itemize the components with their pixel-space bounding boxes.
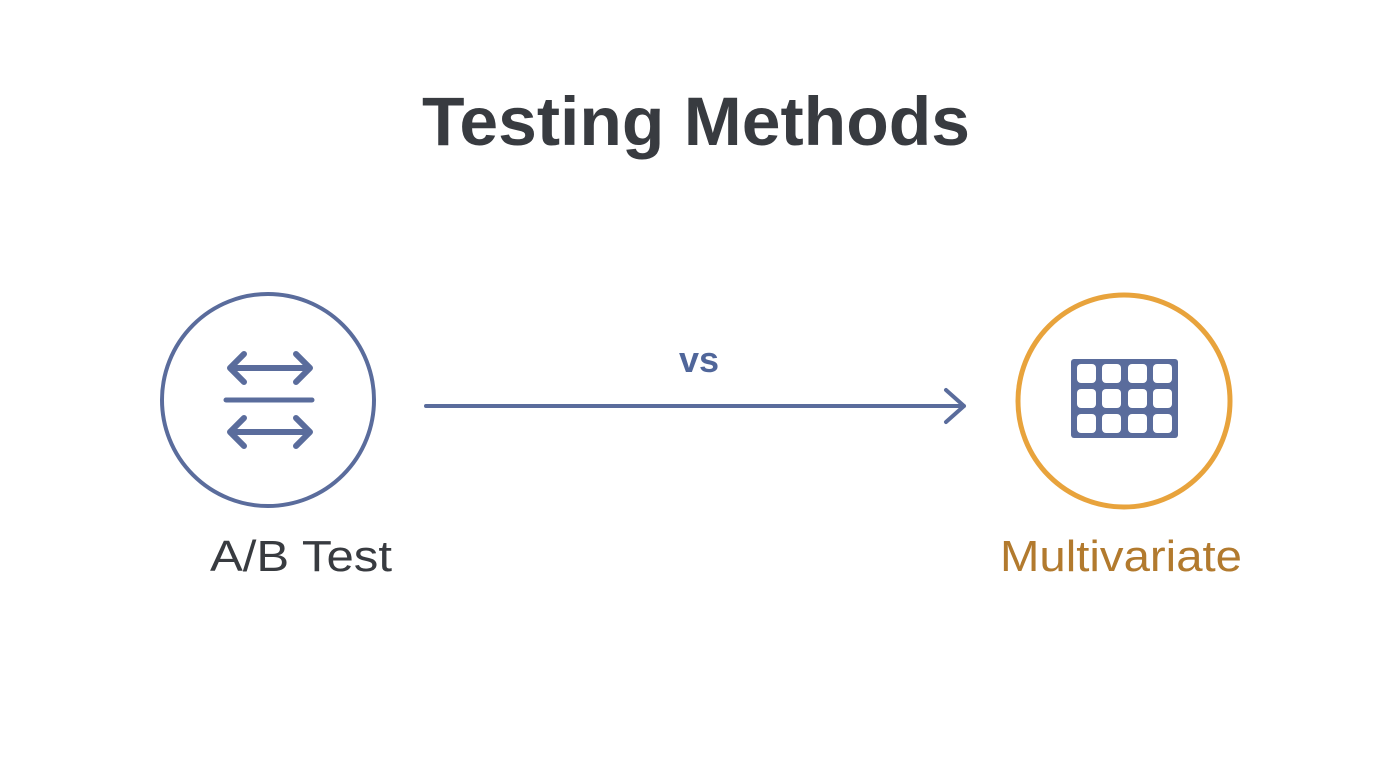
arrow: vs [426, 390, 964, 422]
icon: A/B test circle [162, 294, 374, 506]
label: Multivariate: Multivariate [1000, 532, 1242, 581]
icon: multivariate circle [1018, 295, 1230, 507]
label: vs: vs [679, 339, 719, 380]
label: A/B Test: A/B Test [210, 532, 392, 581]
title: Testing Methods [422, 83, 970, 160]
